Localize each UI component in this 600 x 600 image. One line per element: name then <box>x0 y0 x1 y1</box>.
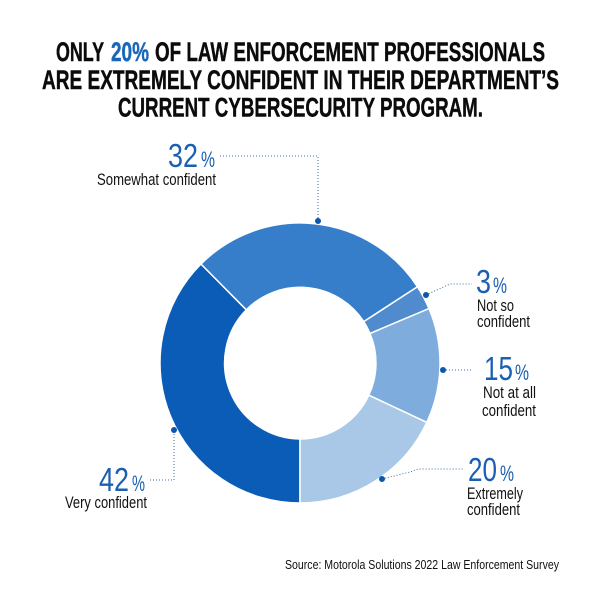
callout: not so confident 3%: % <box>493 273 507 298</box>
title <box>42 37 559 122</box>
callout: very confident 42%: % <box>132 471 145 496</box>
title: 20% <box>111 37 149 67</box>
callout: somewhat confident 32% <box>97 137 321 224</box>
callout: somewhat confident 32%: Somewhat confident <box>97 171 216 189</box>
segment: extremely confident 20% <box>300 395 427 503</box>
callout: not at all confident 15%: Not at all <box>483 384 536 402</box>
callout: not so confident 3%: Not so <box>477 297 514 315</box>
callout: very confident 42% <box>65 427 177 512</box>
callout: extremely confident 20%: confident <box>467 501 520 519</box>
segment: not so confident 3% <box>364 287 429 334</box>
callout: not so confident 3%: confident <box>477 313 530 331</box>
callout: extremely confident 20% <box>379 451 524 519</box>
segment: somewhat confident 32% <box>201 223 418 322</box>
callout: somewhat confident 32%: 32 <box>168 137 198 174</box>
callout: extremely confident 20%: 20 <box>468 451 497 488</box>
callout: very confident 42%: 42 <box>99 461 129 498</box>
callout: extremely confident 20%: % <box>500 461 514 486</box>
segment: not at all confident 15% <box>369 309 440 422</box>
callout: not at all confident 15%: 15 <box>484 350 513 387</box>
title: ONLY <box>56 37 104 67</box>
segment: very confident 42% <box>160 264 300 503</box>
callout: very confident 42%: Very confident <box>65 494 147 512</box>
callout: not so confident 3%: 3 <box>476 263 491 300</box>
callout: extremely confident 20%: Extremely <box>467 485 524 503</box>
callout: not at all confident 15% <box>440 350 536 420</box>
donut chart <box>160 223 440 503</box>
callout: not at all confident 15%: % <box>515 360 529 385</box>
callout: somewhat confident 32%: % <box>201 147 215 172</box>
callout: not so confident 3% <box>423 263 530 331</box>
callout: not at all confident 15%: confident <box>482 402 536 420</box>
source note: Source: Motorola Solutions 2022 Law Enforcement Survey <box>285 558 560 572</box>
